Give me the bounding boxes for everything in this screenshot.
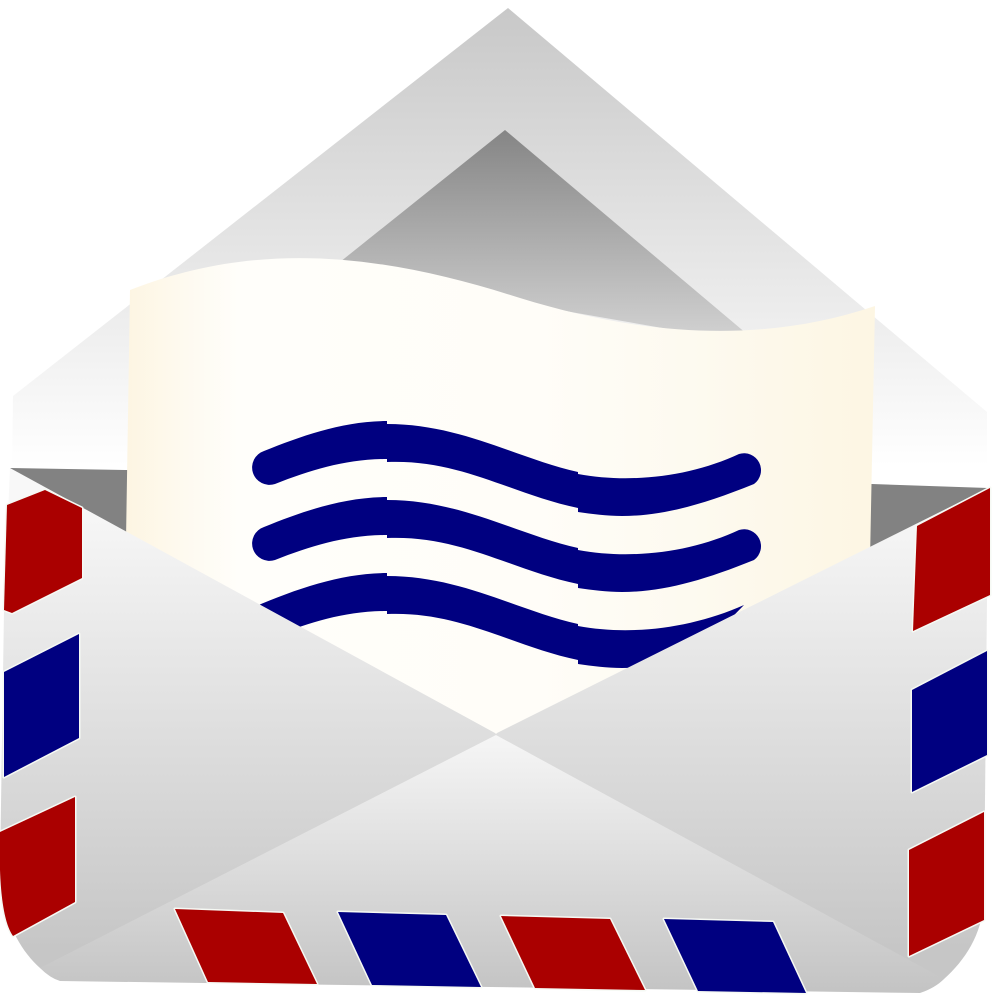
right airmail stripes xyxy=(909,488,990,956)
letter writing lines xyxy=(252,421,761,668)
back flap xyxy=(12,8,987,490)
bottom airmail stripes xyxy=(175,909,806,993)
left airmail stripes xyxy=(0,490,82,936)
left envelope panel xyxy=(0,468,500,975)
right envelope panel xyxy=(492,488,988,985)
letter sheet xyxy=(126,258,875,735)
envelope inside shadow xyxy=(10,468,988,560)
inner dark triangle xyxy=(330,130,760,345)
bottom envelope panel xyxy=(40,735,944,993)
